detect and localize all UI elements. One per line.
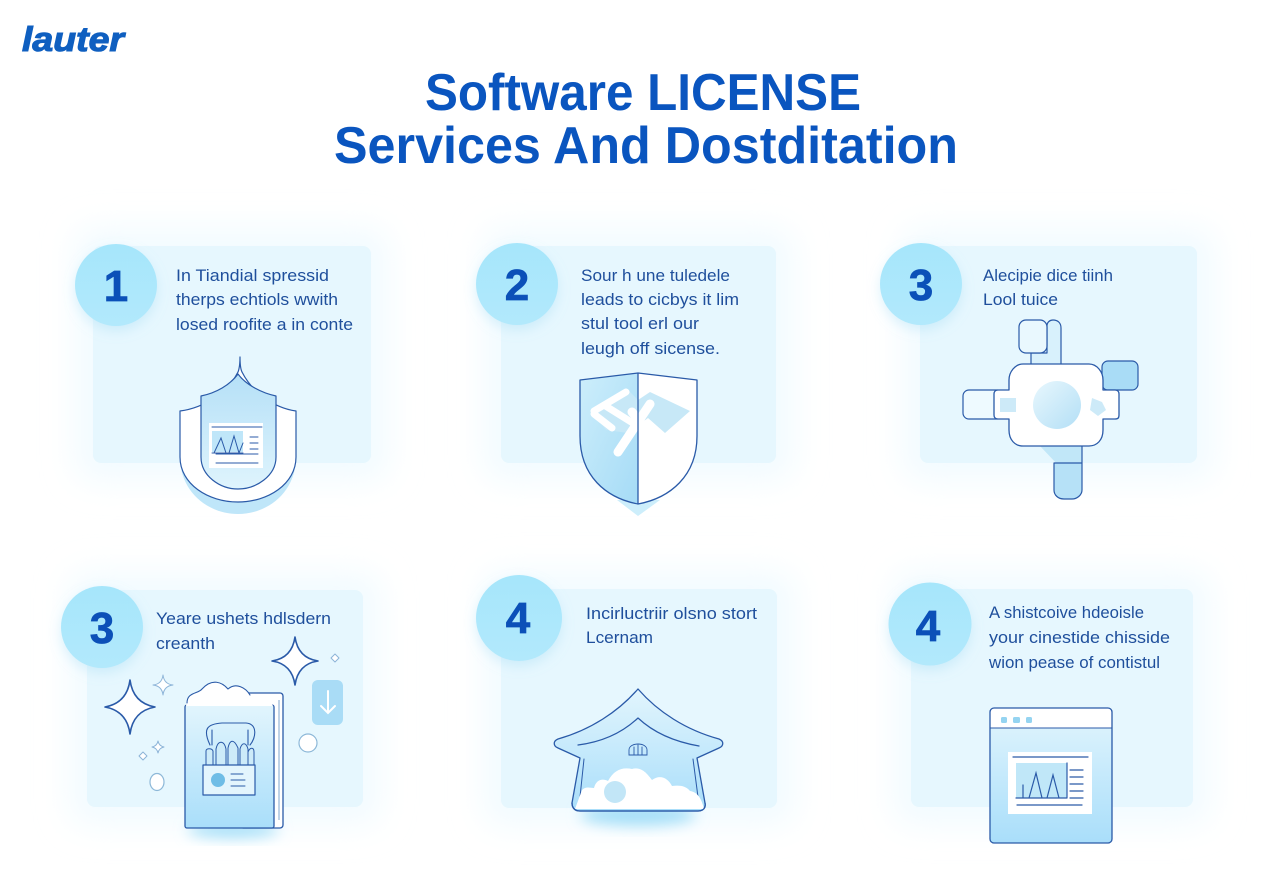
icon: download arrow xyxy=(312,680,343,725)
number badge 5: 4 xyxy=(506,594,531,643)
text block 1: losed roofite a in conte xyxy=(176,316,353,334)
text block 2: leads to cicbys it lim xyxy=(581,291,739,309)
number badge 1 xyxy=(75,244,157,326)
panel 1 xyxy=(75,228,389,514)
number badge 2: 2 xyxy=(505,261,529,310)
text block 4 xyxy=(156,610,331,653)
icon: graduation cap with cloud xyxy=(554,689,723,826)
icon: shield with document xyxy=(180,357,296,514)
text block 5: Incirluctriir olsno stort xyxy=(586,605,757,623)
panel 6 xyxy=(888,571,1211,843)
panel 2 xyxy=(476,228,794,516)
icon: connected modules xyxy=(963,320,1138,499)
logo: lauter xyxy=(22,21,126,59)
text block 3: Lool tuice xyxy=(983,291,1058,309)
number badge 2 xyxy=(476,243,558,325)
text block 2: Sour h une tuledele xyxy=(581,267,730,285)
icon: split shield with crossed tools xyxy=(580,373,697,516)
number badge 4: 3 xyxy=(90,604,114,653)
panel 4 xyxy=(61,572,381,838)
text block 6 xyxy=(988,604,1170,672)
text block 1: In Tiandial spressid xyxy=(176,267,329,285)
number badge 3 xyxy=(880,243,962,325)
title: Services And Dostditation xyxy=(334,117,958,175)
text block 4: Yeare ushets hdlsdern xyxy=(156,610,331,628)
number badge 4 xyxy=(61,586,143,668)
panel 5 xyxy=(476,571,795,826)
text block 2 xyxy=(581,267,739,358)
icon: browser window with chart xyxy=(990,708,1112,843)
icon: book with cloud and basket xyxy=(185,682,283,838)
text block 2: stul tool erl our xyxy=(581,315,700,333)
title xyxy=(334,64,958,175)
text block 1: therps echtiols wwith xyxy=(176,291,338,309)
number badge 6: 4 xyxy=(916,602,941,651)
text block 6: A shistcoive hdeoisle xyxy=(989,604,1144,622)
text block 5 xyxy=(586,605,757,647)
title: Software LICENSE xyxy=(425,64,861,122)
number badge 5 xyxy=(476,575,562,661)
text block 6: wion pease of contistul xyxy=(988,654,1160,672)
text block 2: leugh off sicense. xyxy=(581,340,720,358)
text block 3: Alecipie dice tiinh xyxy=(983,267,1113,285)
number badge 1: 1 xyxy=(104,262,128,311)
icon: dots xyxy=(150,734,317,790)
text block 1 xyxy=(176,267,353,334)
icon: sparkles xyxy=(105,637,339,760)
panel 3 xyxy=(880,228,1215,499)
text block 4: creanth xyxy=(156,635,215,653)
number badge 6 xyxy=(888,582,972,666)
text block 6: your cinestide chisside xyxy=(989,629,1170,647)
text block 5: Lcernam xyxy=(586,629,653,647)
number badge 3: 3 xyxy=(909,261,933,310)
text block 3 xyxy=(983,267,1113,309)
